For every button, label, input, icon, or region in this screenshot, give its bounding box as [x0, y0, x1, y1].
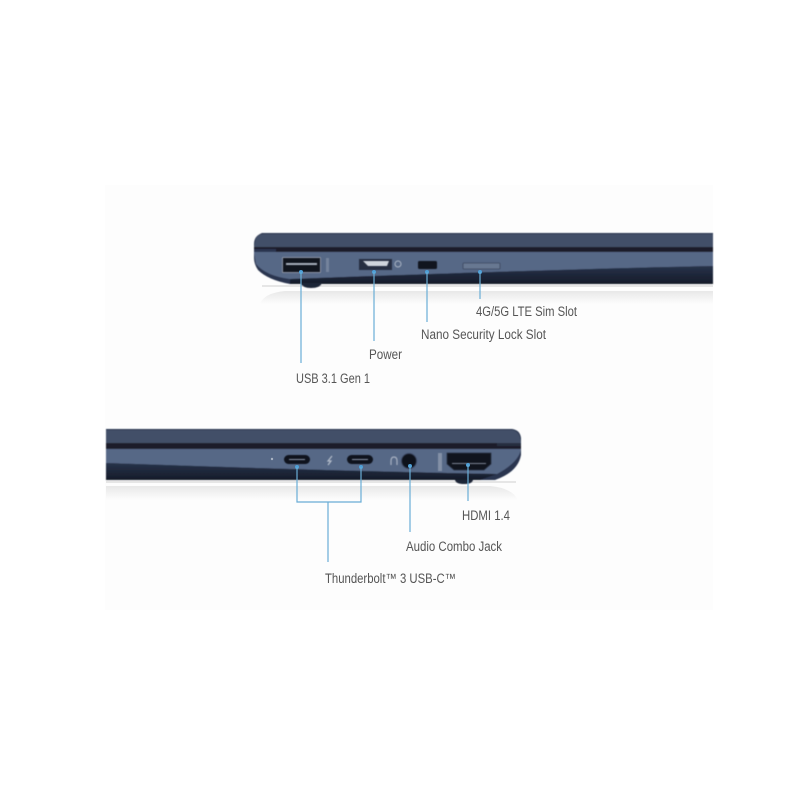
background panel — [105, 185, 713, 610]
status light — [271, 458, 273, 460]
callout: 4G/5G LTE Sim Slot: 4G/5G LTE Sim Slot — [476, 304, 577, 319]
callout: Nano Security Lock Slot: Nano Security Lock Slot — [421, 327, 546, 342]
laptop reflection — [106, 486, 518, 500]
callout: Power — [369, 270, 402, 362]
callout: Thunderbolt 3 USB-C bracket — [295, 465, 456, 586]
panel: right side of laptop — [106, 429, 521, 500]
laptop body — [106, 429, 521, 484]
audio jack — [402, 454, 416, 468]
callout: Thunderbolt 3 USB-C bracket: Thunderbolt™ 3 USB-C™ — [325, 571, 456, 586]
callout: HDMI 1.4 — [462, 463, 510, 523]
callout: HDMI 1.4: HDMI 1.4 — [462, 508, 510, 523]
laptop reflection — [260, 291, 713, 304]
callout: Nano Security Lock Slot — [421, 270, 546, 342]
nano lock slot — [418, 261, 437, 269]
callout: USB 3.1 Gen 1 — [296, 270, 370, 386]
panel: left side of laptop — [254, 233, 713, 304]
callout: USB 3.1 Gen 1: USB 3.1 Gen 1 — [296, 371, 370, 386]
callout: 4G/5G LTE Sim Slot — [476, 270, 577, 319]
laptop body — [254, 233, 713, 288]
Thunderbolt port 2 — [347, 455, 373, 464]
callout: Audio Combo Jack: Audio Combo Jack — [406, 539, 502, 554]
thunderbolt icon — [328, 456, 332, 465]
power button — [359, 259, 401, 270]
USB port — [282, 257, 329, 273]
headset icon — [391, 457, 397, 465]
sim slot — [463, 263, 500, 269]
Thunderbolt port 1 — [284, 455, 310, 464]
callout: Power: Power — [369, 347, 402, 362]
HDMI port — [438, 453, 491, 471]
callout: Audio Combo Jack — [406, 464, 502, 554]
